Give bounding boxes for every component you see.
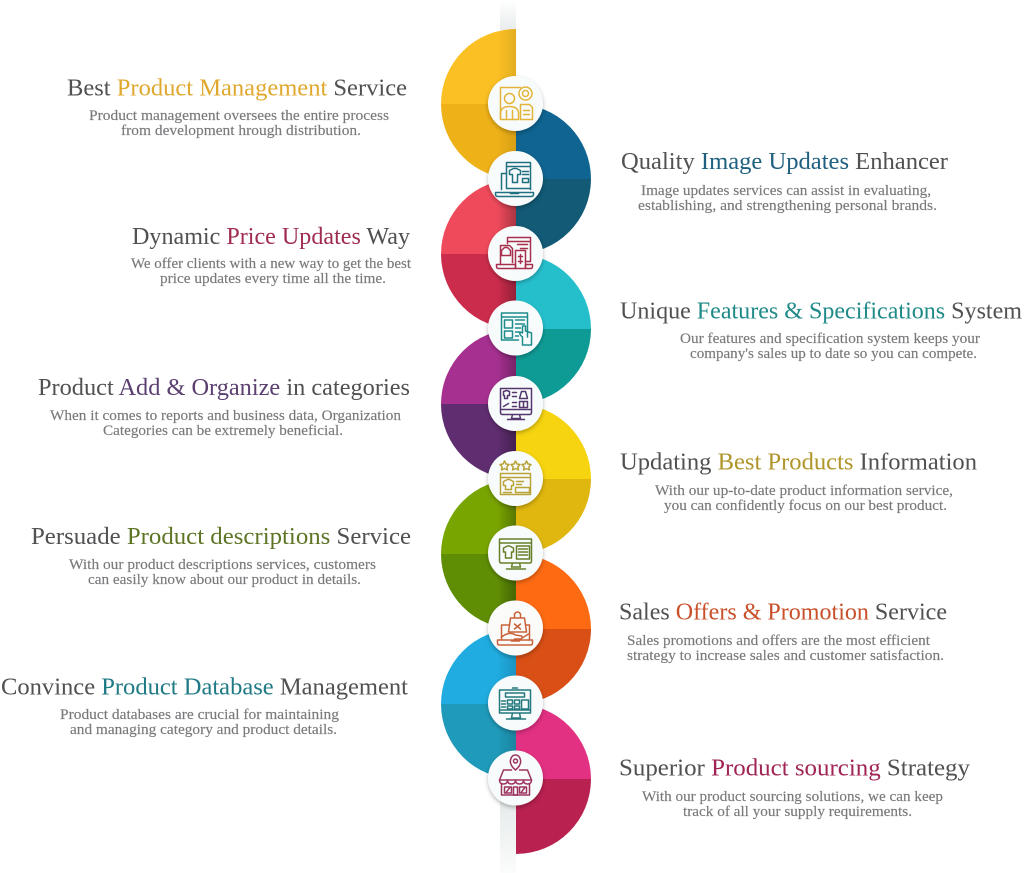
- description: Product databases are crucial for maintaining: [60, 707, 339, 723]
- description: and managing category and product details.: [70, 722, 337, 738]
- description: When it comes to reports and business data, Organization: [50, 408, 402, 424]
- description: [638, 183, 937, 214]
- description: With our up-to-date product information service,: [655, 483, 953, 499]
- description: [50, 408, 402, 439]
- icon: best products rating: [488, 451, 543, 506]
- segment: cyan: [516, 254, 591, 404]
- heading: Quality Image Updates Enhancer: [621, 149, 948, 175]
- icon: product sourcing store: [488, 750, 543, 806]
- heading: Dynamic Price Updates Way: [132, 224, 410, 250]
- icon: features and specifications: [488, 300, 543, 356]
- icon: organize categories monitor: [488, 376, 543, 431]
- icon: price updates: [488, 226, 543, 281]
- icon: product manager: [488, 76, 543, 131]
- text block: Persuade Product descriptions Service: [31, 524, 411, 588]
- central vertical strip: [500, 0, 516, 873]
- text block: Product Add and Organize: [38, 375, 410, 439]
- text block: Dynamic Price Updates Way: [131, 224, 411, 287]
- text block: Sales Offers and Promotion Service: [619, 600, 947, 664]
- description: [69, 557, 376, 588]
- segment: sky blue: [441, 629, 516, 779]
- heading: Sales Offers & Promotion Service: [619, 600, 947, 626]
- segment: dark blue: [516, 104, 591, 254]
- icon: offers and promotion: [488, 600, 543, 656]
- text block: Convince Product Database Management: [1, 674, 408, 738]
- description: [642, 789, 943, 820]
- description: can easily know about our product in details.: [88, 572, 361, 588]
- heading: Best Product Management Service: [67, 76, 407, 102]
- segment: orange: [516, 554, 591, 704]
- heading: Convince Product Database Management: [1, 674, 408, 700]
- segment: gold: [516, 404, 591, 554]
- text block: Best Product Management Service: [67, 76, 407, 139]
- heading: Persuade Product descriptions Service: [31, 524, 411, 550]
- icon: product database monitor: [488, 676, 543, 730]
- text block: Quality Image Updates Enhancer: [621, 149, 948, 214]
- segment: purple: [441, 329, 516, 479]
- description: Categories can be extremely beneficial.: [103, 423, 343, 439]
- icon: product descriptions monitor: [488, 526, 543, 580]
- spiral of half circles: [441, 29, 591, 854]
- text block: Updating Best Products Information: [620, 450, 977, 514]
- segment: magenta: [516, 704, 591, 854]
- description: [60, 707, 339, 738]
- description: Product management oversees the entire process: [89, 108, 389, 124]
- description: With our product descriptions services, customers: [69, 557, 376, 573]
- description: price updates every time all the time.: [160, 271, 386, 287]
- description: establishing, and strengthening personal brands.: [638, 198, 937, 214]
- heading: Superior Product sourcing Strategy: [619, 756, 970, 782]
- description: from development hrough distribution.: [121, 123, 361, 139]
- heading: Unique Features & Specifications System: [620, 298, 1022, 324]
- description: [627, 633, 944, 664]
- description: [655, 483, 953, 514]
- description: track of all your supply requirements.: [683, 804, 912, 820]
- description: [131, 256, 411, 287]
- segment: yellow: [441, 29, 516, 179]
- segment: green: [441, 479, 516, 629]
- icon badges: [488, 76, 543, 806]
- description: Image updates services can assist in evaluating,: [641, 183, 931, 199]
- description: strategy to increase sales and customer satisfaction.: [627, 648, 944, 664]
- description: Our features and specification system keeps your: [680, 331, 980, 347]
- text block: Unique Features and Specifications System: [620, 298, 1022, 362]
- description: Sales promotions and offers are the most efficient: [627, 633, 930, 649]
- description: We offer clients with a new way to get the best: [131, 256, 411, 272]
- text block: Superior Product sourcing Strategy: [619, 756, 970, 820]
- segment: red: [441, 179, 516, 329]
- description: you can confidently focus on our best product.: [664, 498, 947, 514]
- heading: Product Add & Organize in categories: [38, 375, 410, 401]
- description: [680, 331, 980, 362]
- description: [89, 108, 389, 139]
- description: company's sales up to date so you can compete.: [690, 346, 977, 362]
- icon: image updates laptop: [488, 151, 543, 206]
- description: With our product sourcing solutions, we can keep: [642, 789, 943, 805]
- heading: Updating Best Products Information: [620, 450, 977, 476]
